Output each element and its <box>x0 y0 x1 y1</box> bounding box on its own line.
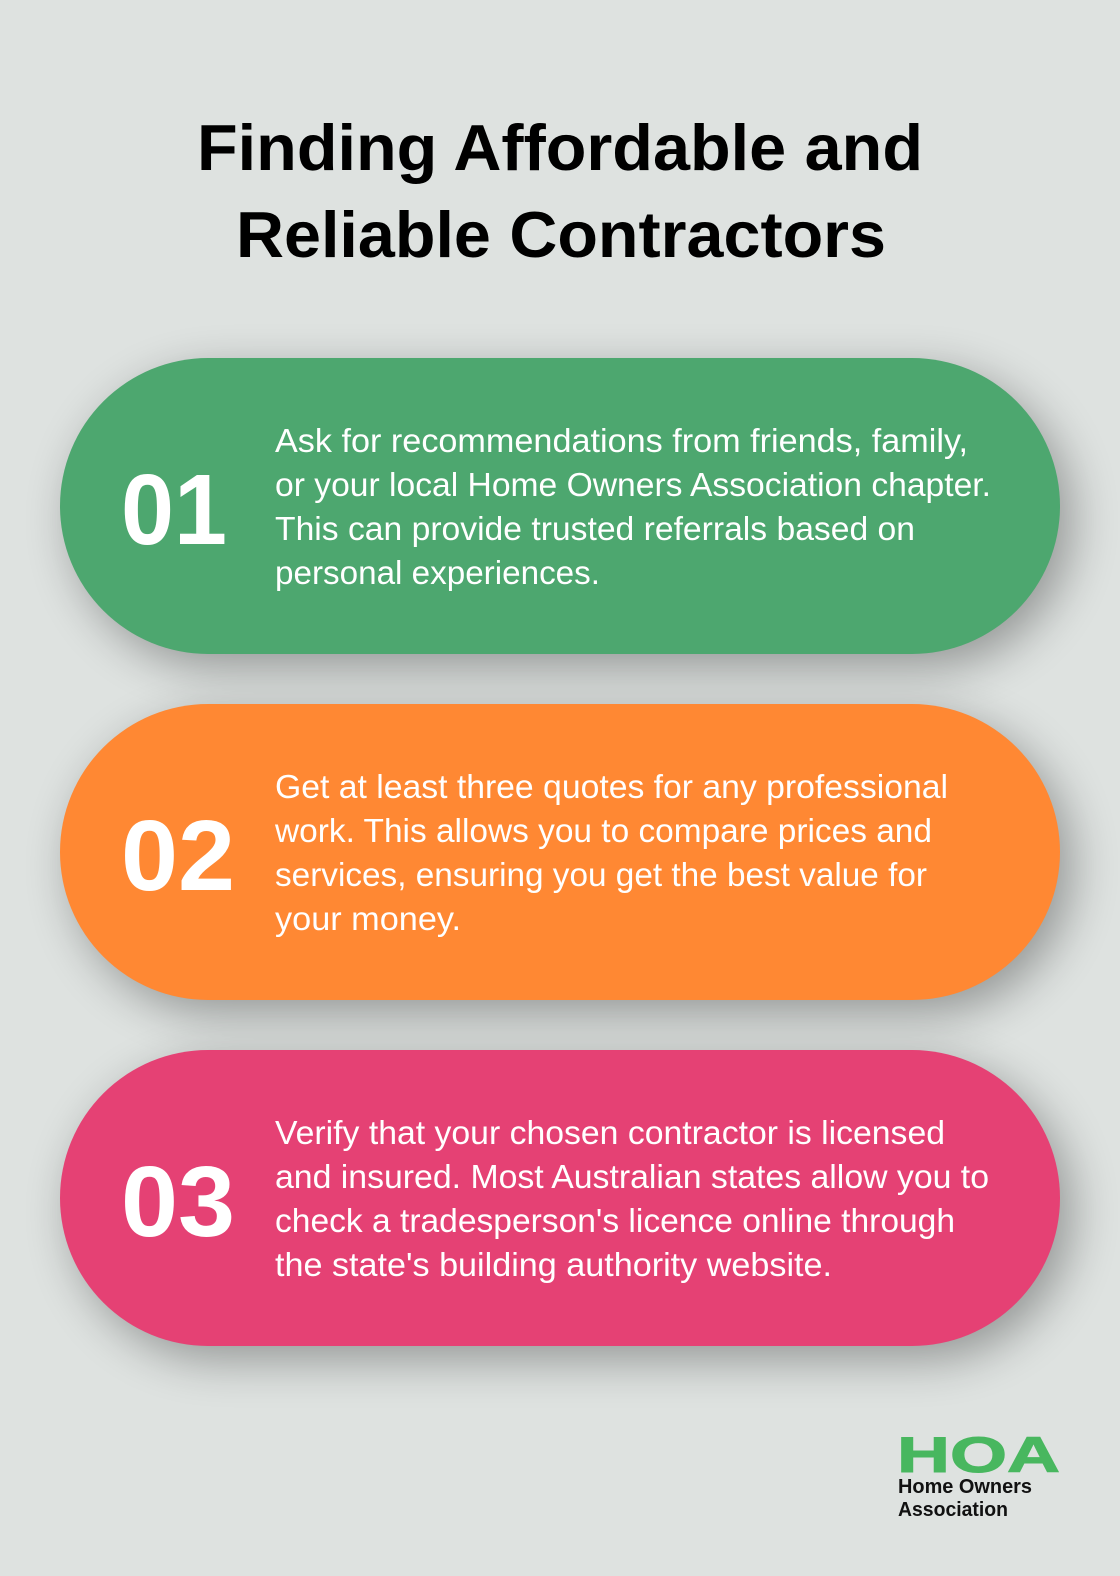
number 02: 02 <box>121 800 235 912</box>
text: step 02 body: your money. <box>275 900 461 937</box>
logo: HOA Home Owners Association: Home Owners <box>898 1476 1032 1498</box>
panel: step 01 green <box>60 358 1060 654</box>
panel: step 02 orange <box>60 704 1060 1000</box>
text: step 01 body: or your local Home Owners Association chapter. <box>275 466 991 503</box>
text: step 02 body: work. This allows you to compare prices and <box>274 812 932 849</box>
text: step 01 body <box>275 422 991 591</box>
text: step 03 body: Verify that your chosen contractor is licensed <box>275 1114 945 1151</box>
text: step 01 body: This can provide trusted referrals based on <box>275 510 915 547</box>
text: step 02 body: Get at least three quotes for any professional <box>275 768 948 805</box>
text: step 02 body <box>274 768 948 937</box>
logo: HOA Home Owners Association <box>897 1427 1060 1521</box>
logo: HOA Home Owners Association: Association <box>898 1499 1008 1521</box>
text: step 01 body: Ask for recommendations from friends, family, <box>275 422 968 459</box>
number 01: 01 <box>121 454 227 566</box>
title: Finding Affordable and <box>197 111 923 184</box>
logo: HOA Home Owners Association: HOA <box>897 1427 1060 1483</box>
text: step 03 body: the state's building authority website. <box>275 1246 832 1283</box>
text: step 02 body: services, ensuring you get the best value for <box>275 856 927 893</box>
number 03: 03 <box>121 1146 235 1258</box>
panel: step 03 pink <box>60 1050 1060 1346</box>
text: step 03 body: and insured. Most Australian states allow you to <box>275 1158 989 1195</box>
text: step 01 body: personal experiences. <box>275 554 600 591</box>
title <box>197 111 923 271</box>
text: step 03 body <box>275 1114 989 1283</box>
text: step 03 body: check a tradesperson's licence online through <box>275 1202 955 1239</box>
title: Reliable Contractors <box>236 198 886 271</box>
